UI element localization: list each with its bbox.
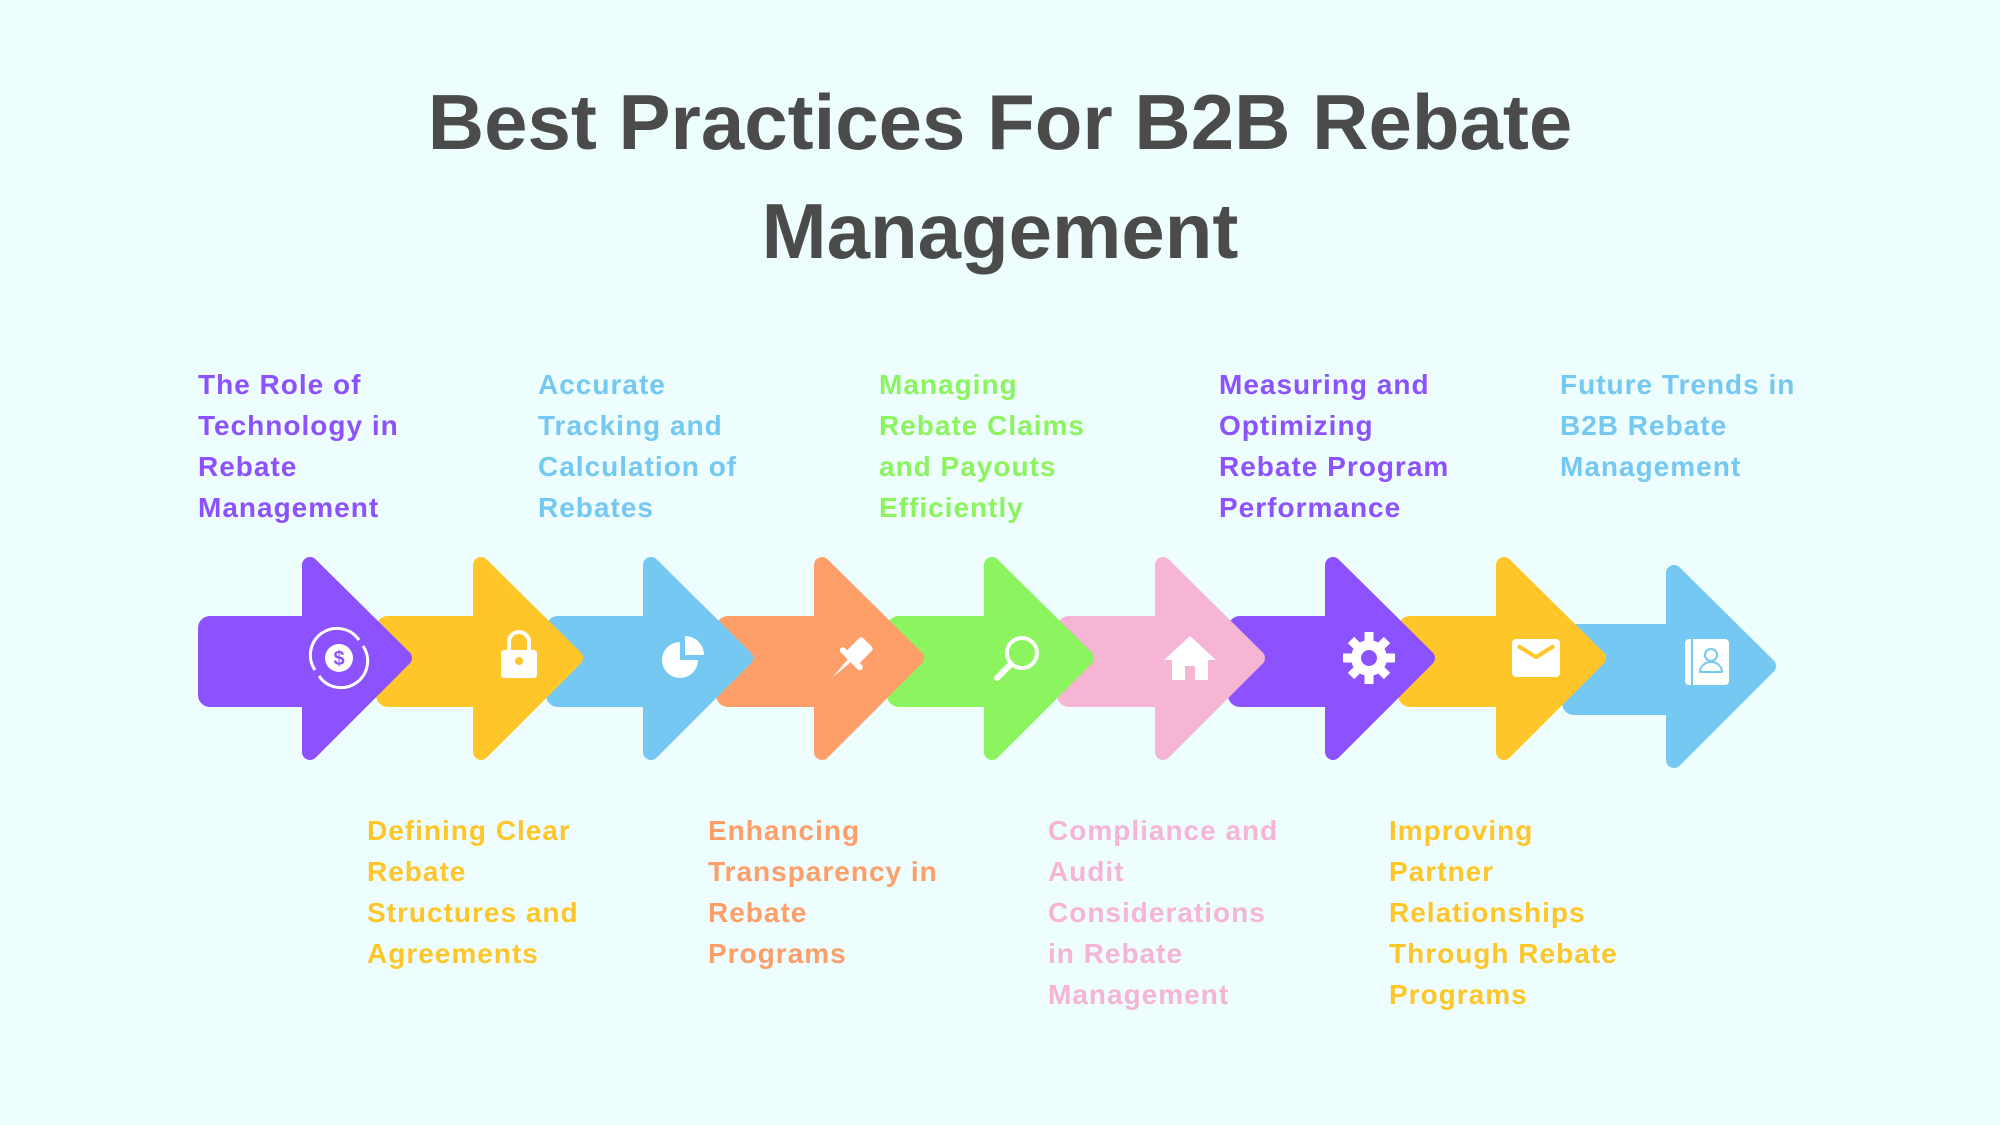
icon: gear xyxy=(1343,632,1395,684)
label: technology: Management xyxy=(198,492,379,523)
label: future trends: Management xyxy=(1560,451,1741,482)
label: measuring: Rebate Program xyxy=(1219,451,1449,482)
label: partners: Programs xyxy=(1389,979,1528,1010)
label: measuring: Measuring and xyxy=(1219,369,1430,400)
icon: lock xyxy=(501,632,537,678)
title: Management xyxy=(762,187,1238,275)
label: accurate tracking: Calculation of xyxy=(538,451,737,482)
label: transparency: Programs xyxy=(708,938,847,969)
title: Best Practices For B2B Rebate xyxy=(428,78,1572,166)
arrow 1 purple xyxy=(206,565,404,752)
label: accurate tracking: Accurate xyxy=(538,369,666,400)
title xyxy=(428,78,1572,275)
label: transparency: Transparency in xyxy=(708,856,938,887)
label: measuring: Optimizing xyxy=(1219,410,1374,441)
label: accurate tracking: Rebates xyxy=(538,492,654,523)
label: transparency: Rebate xyxy=(708,897,807,928)
label: partners: Relationships xyxy=(1389,897,1586,928)
label: partners xyxy=(1389,815,1618,1010)
icon: pin xyxy=(822,632,878,688)
label: defining structures xyxy=(367,815,579,969)
label: technology: Rebate xyxy=(198,451,297,482)
icon: pie chart xyxy=(662,636,704,678)
icon: dollar cycle xyxy=(310,628,368,688)
arrow 3 blue xyxy=(554,565,745,752)
arrow 9 blue xyxy=(1570,573,1768,760)
label: managing claims: Rebate Claims xyxy=(879,410,1085,441)
label: compliance: Compliance and xyxy=(1048,815,1278,846)
label: defining structures: Agreements xyxy=(367,938,539,969)
label: transparency: Enhancing xyxy=(708,815,860,846)
label: defining structures: Defining Clear xyxy=(367,815,571,846)
arrow 8 yellow xyxy=(1406,565,1598,752)
arrow 7 purple xyxy=(1236,565,1427,752)
label: compliance: in Rebate xyxy=(1048,938,1183,969)
icon: dollar cycle: $ xyxy=(333,648,345,670)
label: partners: Partner xyxy=(1389,856,1494,887)
label: managing claims xyxy=(879,369,1085,523)
label: managing claims: Efficiently xyxy=(879,492,1024,523)
label: compliance xyxy=(1048,815,1278,1010)
label: future trends: B2B Rebate xyxy=(1560,410,1727,441)
label: partners: Through Rebate xyxy=(1389,938,1618,969)
icon: contact book xyxy=(1685,639,1729,685)
label: transparency xyxy=(708,815,938,969)
label: managing claims: Managing xyxy=(879,369,1018,400)
label: technology: The Role of xyxy=(198,369,361,400)
icon: envelope xyxy=(1512,639,1560,677)
label: measuring: Performance xyxy=(1219,492,1401,523)
label: managing claims: and Payouts xyxy=(879,451,1056,482)
label: partners: Improving xyxy=(1389,815,1533,846)
label: measuring xyxy=(1219,369,1449,523)
label: defining structures: Rebate xyxy=(367,856,466,887)
label: future trends xyxy=(1560,369,1795,482)
label: compliance: Considerations xyxy=(1048,897,1266,928)
label: compliance: Audit xyxy=(1048,856,1125,887)
arrow 5 green xyxy=(895,565,1086,752)
label: compliance: Management xyxy=(1048,979,1229,1010)
arrow 4 orange xyxy=(724,565,916,752)
label: defining structures: Structures and xyxy=(367,897,579,928)
label: technology: Technology in xyxy=(198,410,399,441)
icon: house xyxy=(1164,636,1216,680)
icon: magnifier xyxy=(997,638,1037,678)
arrow 2 yellow xyxy=(384,565,575,752)
label: future trends: Future Trends in xyxy=(1560,369,1795,400)
label: technology xyxy=(198,369,399,523)
label: accurate tracking: Tracking and xyxy=(538,410,723,441)
arrow 6 pink xyxy=(1065,565,1257,752)
label: accurate tracking xyxy=(538,369,737,523)
